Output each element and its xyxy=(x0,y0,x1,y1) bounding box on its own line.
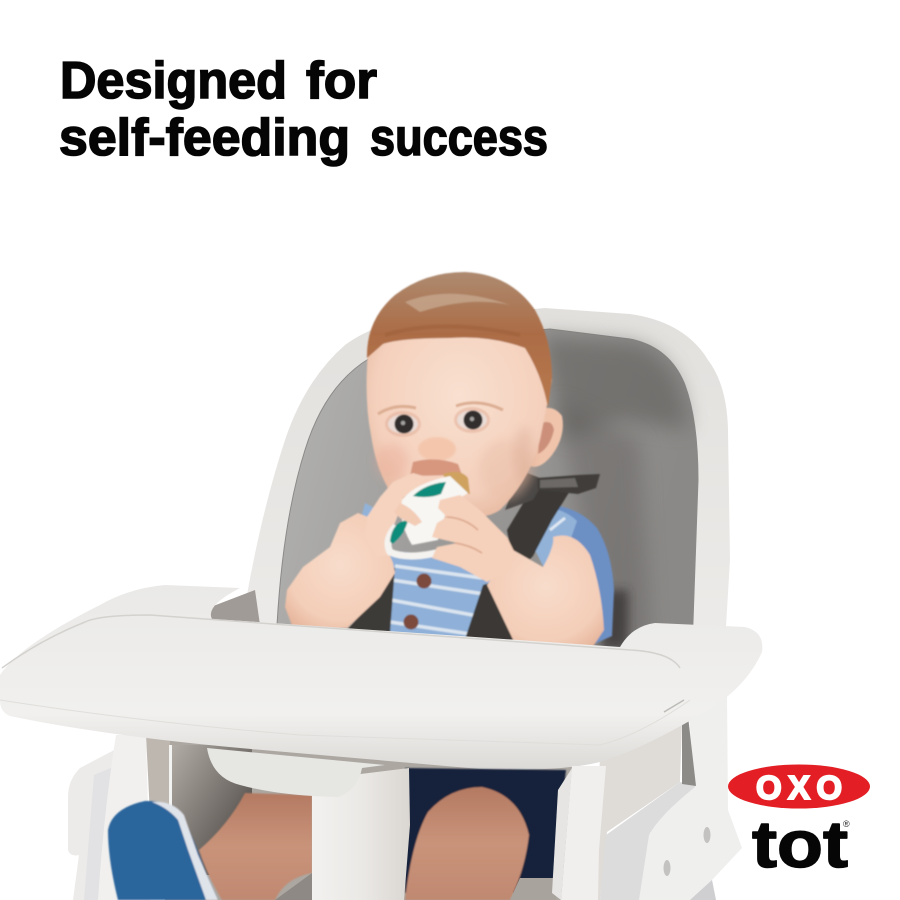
shirt stripes xyxy=(390,566,484,634)
center post xyxy=(312,768,410,900)
tray xyxy=(0,585,762,770)
eyebrows xyxy=(378,406,416,414)
cup body xyxy=(401,476,468,545)
baby right arm xyxy=(487,535,604,648)
baby left palm xyxy=(365,473,427,557)
ear xyxy=(530,408,563,467)
cheek shading xyxy=(376,444,408,480)
chair dark seat interior xyxy=(165,735,575,900)
right frame outer panel xyxy=(639,695,742,900)
seat bottom xyxy=(275,873,312,900)
tray under-handle xyxy=(207,748,385,797)
baby left arm xyxy=(285,513,395,628)
title xyxy=(59,52,548,167)
legs and footwear xyxy=(108,768,566,900)
right frame upper panel xyxy=(590,722,682,900)
high chair: lower frame xyxy=(68,695,742,900)
logo registered mark: ® xyxy=(843,819,850,829)
right eye xyxy=(454,407,490,433)
tray inner rim line xyxy=(2,615,680,668)
title: success xyxy=(370,109,548,167)
baby right hand xyxy=(432,495,515,582)
tray recess xyxy=(208,590,260,625)
shoe xyxy=(108,801,218,900)
chair back grey pad xyxy=(277,329,698,650)
cup handle xyxy=(388,526,457,556)
title: Designed xyxy=(60,52,287,110)
chair left column xyxy=(98,735,150,900)
left eye xyxy=(385,411,421,437)
shirt buttons xyxy=(416,574,432,588)
title: for xyxy=(306,52,377,110)
shirt left sleeve xyxy=(358,503,378,540)
shirt right sleeve xyxy=(533,505,614,645)
baby xyxy=(285,272,614,648)
shirt torso xyxy=(385,550,515,645)
teether cup xyxy=(388,472,470,556)
right frame side strut xyxy=(600,782,696,900)
cup tip xyxy=(443,472,470,494)
right post xyxy=(561,766,606,900)
harness buckle xyxy=(537,474,600,494)
head xyxy=(367,305,552,520)
right thigh xyxy=(405,787,529,900)
chair back shell xyxy=(246,308,730,700)
harness left strap xyxy=(345,567,395,633)
logo OXO wordmark: OXO xyxy=(756,769,842,806)
harness right strap xyxy=(462,580,520,648)
chair left handle xyxy=(68,748,125,900)
logo tot wordmark: tot xyxy=(752,807,848,881)
mouth shadow xyxy=(410,459,462,476)
title: self-feeding xyxy=(59,109,350,167)
nose xyxy=(418,437,456,461)
left thigh xyxy=(199,793,312,900)
teal patches xyxy=(413,482,446,497)
baby left fingers xyxy=(394,503,422,526)
harness shoulder strap xyxy=(507,486,573,575)
centre and right posts xyxy=(207,748,606,900)
logo red oval xyxy=(728,764,870,808)
logo: OXO tot xyxy=(728,764,870,881)
hair xyxy=(367,272,552,408)
shorts xyxy=(405,768,566,893)
